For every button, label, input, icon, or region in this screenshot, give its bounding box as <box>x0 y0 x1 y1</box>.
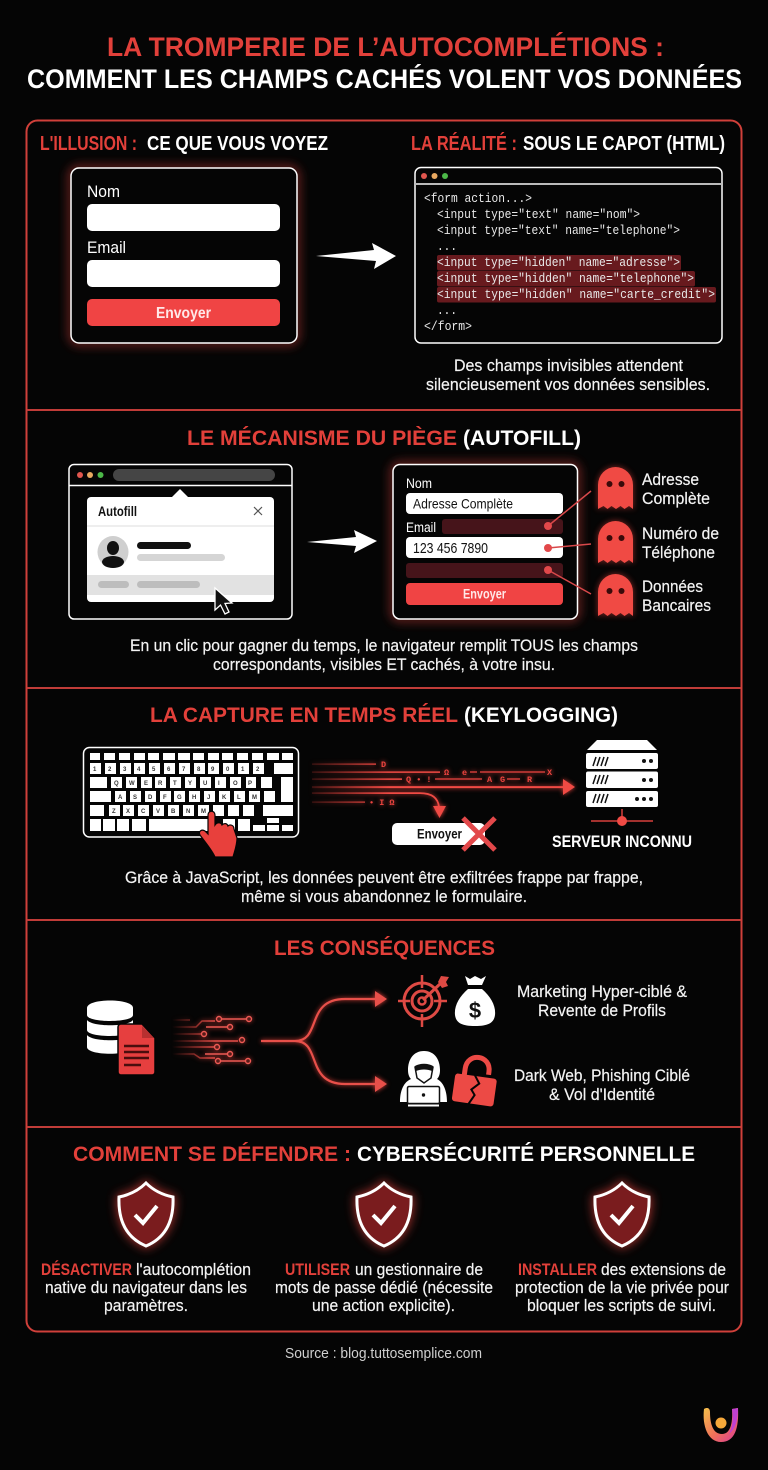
code window: <input type="hidden" name="carte_credit"> <box>437 288 715 302</box>
data streams: e <box>462 768 467 778</box>
label: dark web: Dark Web, Phishing Ciblé <box>514 1066 690 1085</box>
autofilled form: Envoyer <box>463 586 507 602</box>
caption: correspondants, visibles ET cachés, à votre insu. <box>213 655 555 674</box>
code window: ... <box>437 304 457 318</box>
data circuit <box>172 1016 252 1064</box>
visible form: Envoyer <box>156 305 211 322</box>
data streams: Ω <box>444 768 449 778</box>
autofilled form <box>393 464 578 619</box>
tip 2 <box>275 1260 493 1315</box>
tip 2: une action explicite). <box>312 1296 455 1315</box>
envoyer button crossed out <box>392 818 495 850</box>
panel: illusion and reality <box>40 132 725 394</box>
code window <box>415 168 722 343</box>
code window: <input type="hidden" name="telephone"> <box>437 272 694 286</box>
label: dark web: & Vol d'Identité <box>549 1085 655 1104</box>
server label: SERVEUR INCONNU <box>552 832 692 851</box>
icon: hand pressing key <box>199 811 237 857</box>
data streams: R <box>527 775 533 785</box>
data streams: X <box>547 768 553 778</box>
visible form <box>71 168 297 343</box>
icon: keyboard: ASDFGHJKLM <box>118 795 257 801</box>
caption <box>125 868 643 906</box>
heading: reality: SOUS LE CAPOT (HTML) <box>523 133 725 155</box>
heading: COMMENT SE DÉFENDRE : <box>73 1143 351 1166</box>
ghost labels: Bancaires <box>642 596 711 615</box>
icon: server <box>586 740 658 826</box>
visible form: Email <box>87 238 126 257</box>
icon: keyboard <box>84 748 298 837</box>
label: marketing <box>517 982 688 1020</box>
heading: (AUTOFILL) <box>463 427 581 450</box>
tip 3: bloquer les scripts de suivi. <box>527 1296 716 1315</box>
ghost labels <box>642 470 719 615</box>
ghost labels: Données <box>642 577 703 596</box>
caption: Des champs invisibles attendent <box>454 356 683 375</box>
tip 3: protection de la vie privée pour <box>515 1278 729 1297</box>
heading: illusion: CE QUE VOUS VOYEZ <box>147 133 328 155</box>
tip 2: un gestionnaire de <box>355 1260 483 1279</box>
icon: shield 3 <box>595 1183 649 1246</box>
caption: silencieusement vos données sensibles. <box>426 375 710 394</box>
arrow <box>316 243 396 269</box>
connector lines <box>544 491 591 594</box>
icon: money bag <box>455 976 495 1026</box>
heading: (KEYLOGGING) <box>464 704 618 727</box>
tip 3 <box>515 1260 729 1315</box>
panel: outer frame <box>26 120 742 1332</box>
tip 1: paramètres. <box>104 1296 188 1315</box>
panel: autofill mechanism <box>69 427 719 674</box>
code window: ... <box>437 240 457 254</box>
code window: <input type="hidden" name="adresse"> <box>437 256 680 270</box>
icon: keyboard: 123456789012 <box>93 767 260 773</box>
tip 3: des extensions de <box>601 1260 726 1279</box>
icon: target <box>398 975 449 1027</box>
autofilled form: Email <box>406 520 436 535</box>
heading <box>150 704 618 727</box>
tip 2: mots de passe dédié (nécessite <box>275 1278 493 1297</box>
heading: CYBERSÉCURITÉ PERSONNELLE <box>357 1143 695 1166</box>
heading: LES CONSÉQUENCES <box>274 937 495 960</box>
tip 1 <box>41 1260 251 1315</box>
heading <box>187 427 581 450</box>
code window: <form action...> <box>424 192 532 206</box>
caption: Grâce à JavaScript, les données peuvent être exfiltrées frappe par frappe, <box>125 868 643 887</box>
autofilled form: 123 456 7890 <box>413 540 488 557</box>
icon: ghost phone <box>598 521 633 563</box>
title: LA TROMPERIE DE L’AUTOCOMPLÉTIONS : <box>107 31 664 62</box>
tip 2: UTILISER <box>285 1260 350 1279</box>
data streams: • I Ω <box>369 798 395 808</box>
icon: broken lock <box>451 1055 500 1108</box>
code window: <input type="text" name="telephone"> <box>437 224 680 238</box>
data streams: G <box>500 775 505 785</box>
ghost labels: Adresse <box>642 470 699 489</box>
arrow <box>307 530 377 553</box>
code window: </form> <box>424 320 472 334</box>
logo <box>704 1408 738 1442</box>
data streams <box>312 760 575 818</box>
tip 1: native du navigateur dans les <box>45 1278 247 1297</box>
icon: ghost address <box>598 467 633 509</box>
icon: ghost bank <box>598 574 633 616</box>
title <box>27 31 742 94</box>
visible form: Nom <box>87 182 120 201</box>
icon: hacker <box>400 1051 447 1106</box>
envoyer button crossed out: Envoyer <box>417 826 462 842</box>
heading: illusion <box>40 133 328 155</box>
heading: LA CAPTURE EN TEMPS RÉEL <box>150 704 458 727</box>
heading <box>73 1143 695 1166</box>
caption: même si vous abandonnez le formulaire. <box>241 887 527 906</box>
browser window with autofill popup <box>69 464 292 619</box>
caption <box>130 636 638 674</box>
icon: cursor <box>215 588 232 614</box>
label: marketing: Revente de Profils <box>538 1001 666 1020</box>
icon: keyboard: QWERTYUIOP <box>114 781 252 787</box>
icon: shield 1 <box>119 1183 173 1246</box>
data streams: Q • ! <box>406 775 432 785</box>
label: marketing: Marketing Hyper-ciblé & <box>517 982 688 1001</box>
browser window with autofill popup: Autofill <box>98 504 137 519</box>
caption <box>426 356 710 394</box>
icon: money bag: $ <box>469 998 481 1023</box>
icon: shield 2 <box>357 1183 411 1246</box>
heading: reality <box>411 132 725 155</box>
ghost labels: Complète <box>642 489 710 508</box>
heading: illusion: L'ILLUSION : <box>40 133 137 155</box>
autofilled form: Adresse Complète <box>413 496 513 512</box>
source: Source : blog.tuttosemplice.com <box>285 1345 482 1362</box>
ghost labels: Téléphone <box>642 543 715 562</box>
data streams: D <box>381 760 386 770</box>
branching arrows <box>261 991 387 1092</box>
heading: LE MÉCANISME DU PIÈGE <box>187 427 457 450</box>
heading: reality: LA RÉALITÉ : <box>411 132 517 155</box>
panel: defense <box>41 1143 729 1315</box>
icon: database and document <box>87 1000 155 1075</box>
caption: En un clic pour gagner du temps, le navigateur remplit TOUS les champs <box>130 636 638 655</box>
panel: consequences <box>87 937 690 1108</box>
label: dark web <box>514 1066 690 1104</box>
tip 3: INSTALLER <box>518 1260 597 1279</box>
tip 1: l'autocomplétion <box>136 1260 251 1279</box>
data streams: A <box>487 775 493 785</box>
autofilled form: Nom <box>406 476 432 491</box>
tip 1: DÉSACTIVER <box>41 1260 132 1279</box>
panel: keylogging <box>84 704 692 906</box>
icon: keyboard: ZXCVBNM <box>112 809 206 815</box>
code window: <input type="text" name="nom"> <box>437 208 640 222</box>
ghost labels: Numéro de <box>642 524 719 543</box>
